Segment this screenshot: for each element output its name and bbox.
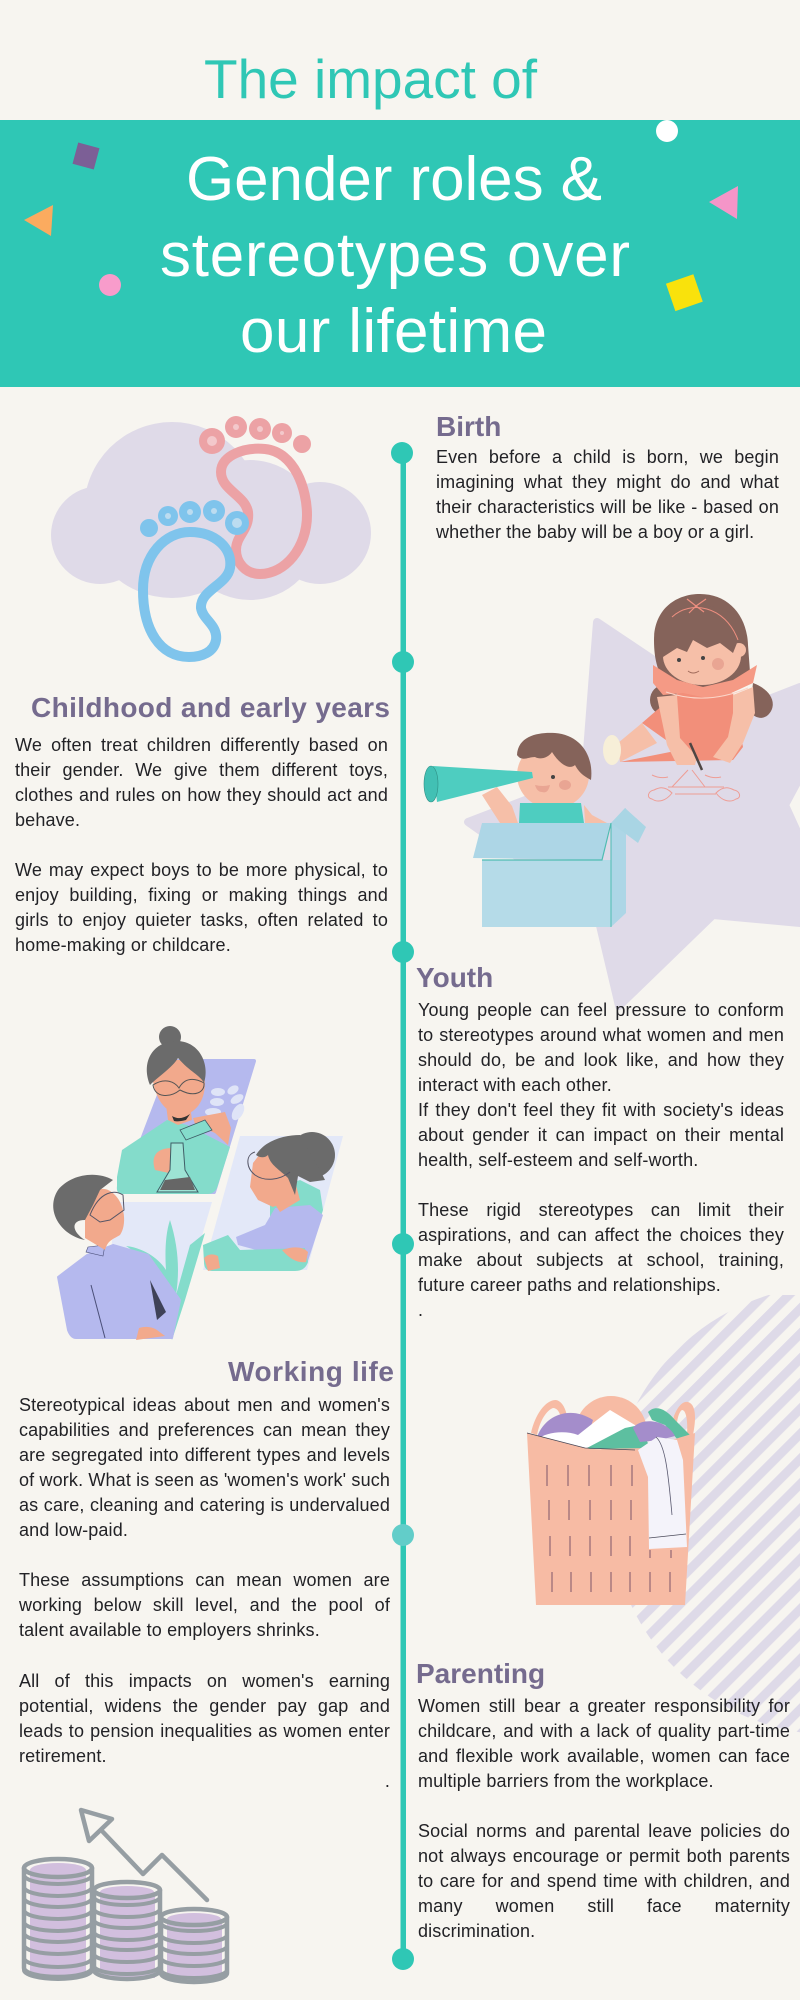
heading: Parenting: Parenting bbox=[416, 1658, 545, 1689]
icon: stacked coins with arrow bbox=[24, 1810, 227, 1982]
text: working life: . bbox=[385, 1771, 390, 1791]
icon: pink circle bbox=[99, 274, 121, 296]
text: working life: of work. What is seen as 'women's work' such bbox=[19, 1470, 390, 1490]
text: birth: imagining what they might do and what bbox=[436, 472, 779, 492]
text: parenting: to care for and spend time with children, and bbox=[418, 1871, 790, 1891]
timeline dot: youth bbox=[392, 941, 414, 963]
icon: yellow square bbox=[666, 274, 703, 311]
text: working life: working below skill level, and the pool of bbox=[19, 1595, 390, 1615]
text: youth: health, self-esteem and self-worth. bbox=[418, 1150, 698, 1170]
text: parenting: and flexible work available, women can face bbox=[418, 1746, 790, 1766]
heading: Birth: Birth bbox=[436, 411, 501, 442]
timeline dot: end bbox=[392, 1948, 414, 1970]
text: birth: their characteristics will be like - based on bbox=[436, 497, 779, 517]
text: parenting: multiple barriers from the workplace. bbox=[418, 1771, 714, 1791]
text: childhood: behave. bbox=[15, 810, 80, 830]
text: youth: aspirations, and can affect the choices they bbox=[418, 1225, 784, 1245]
text: working life: as care, cleaning and catering is undervalued bbox=[19, 1495, 390, 1515]
text: working life: These assumptions can mean women are bbox=[19, 1570, 390, 1590]
title: The impact of: The impact of bbox=[204, 48, 538, 110]
text: parenting: not always encourage or permit both parents bbox=[418, 1846, 790, 1866]
icon: pink triangle bbox=[709, 186, 738, 219]
illustration: girl drawing bbox=[603, 594, 773, 801]
text: working life bbox=[19, 1395, 390, 1791]
header band bbox=[0, 120, 800, 387]
text: youth: future career paths and relationships. bbox=[418, 1275, 721, 1295]
timeline dot: childhood bbox=[392, 651, 414, 673]
timeline bbox=[391, 442, 414, 1970]
text: birth bbox=[436, 447, 779, 542]
text: childhood: We often treat children differently based on bbox=[15, 735, 388, 755]
timeline dot: parenting bbox=[392, 1524, 414, 1546]
text: childhood: their gender. We give them different toys, bbox=[15, 760, 388, 780]
text: working life: capabilities and preferences can mean they bbox=[19, 1420, 390, 1440]
timeline dot: working life bbox=[392, 1233, 414, 1255]
heading: Youth: Youth bbox=[416, 962, 493, 993]
text: parenting: Women still bear a greater responsibility for bbox=[418, 1696, 790, 1716]
text: childhood bbox=[15, 735, 388, 955]
icon: purple square bbox=[73, 143, 99, 169]
text: parenting bbox=[418, 1696, 790, 1941]
text: working life: potential, widens the gender pay gap and bbox=[19, 1696, 390, 1716]
text: birth: Even before a child is born, we begin bbox=[436, 447, 779, 467]
text: parenting: childcare, and with a lack of quality part-time bbox=[418, 1721, 790, 1741]
icon: white circle bbox=[656, 120, 678, 142]
text: working life: All of this impacts on women's earning bbox=[19, 1671, 390, 1691]
heading: Working life: Working life bbox=[228, 1356, 394, 1387]
text: youth: If they don't feel they fit with society's ideas bbox=[418, 1100, 784, 1120]
text: childhood: clothes and rules on how they should act and bbox=[15, 785, 388, 805]
text: youth: make about subjects at school, training, bbox=[418, 1250, 784, 1270]
text: childhood: girls to enjoy quieter tasks, often related to bbox=[15, 910, 388, 930]
text: youth: These rigid stereotypes can limit their bbox=[418, 1200, 784, 1220]
heading: Childhood and early years: Childhood and early years bbox=[31, 692, 390, 723]
text: parenting: many women still face maternity bbox=[418, 1896, 790, 1916]
text: childhood: home-making or childcare. bbox=[15, 935, 231, 955]
text: youth: should do, be and look like, and how they bbox=[418, 1050, 784, 1070]
text: working life: talent available to employers shrinks. bbox=[19, 1620, 320, 1640]
heading: Gender roles and stereotypes: stereotypes over bbox=[160, 221, 630, 290]
illustration: laundry basket bbox=[527, 1396, 695, 1605]
text: parenting: discrimination. bbox=[418, 1921, 535, 1941]
text: working life: and low-paid. bbox=[19, 1520, 128, 1540]
icon: orange triangle bbox=[24, 205, 53, 236]
timeline dot: birth bbox=[391, 442, 413, 464]
text: youth: Young people can feel pressure to conform bbox=[418, 1000, 784, 1020]
text: youth bbox=[418, 1000, 784, 1320]
illustration: baby footprints on cloud bbox=[51, 416, 371, 657]
text: working life: leads to pension inequalities as women enter bbox=[19, 1721, 390, 1741]
text: working life: Stereotypical ideas about men and women's bbox=[19, 1395, 390, 1415]
text: working life: retirement. bbox=[19, 1746, 107, 1766]
illustration: three scientists bbox=[53, 1026, 343, 1340]
text: childhood: enjoy building, fixing or making things and bbox=[15, 885, 388, 905]
illustration: boy in box with telescope bbox=[424, 733, 646, 927]
text: youth: . bbox=[418, 1300, 423, 1320]
text: parenting: Social norms and parental leave policies do bbox=[418, 1821, 790, 1841]
heading: Gender roles and stereotypes: our lifetime bbox=[240, 297, 547, 366]
text: working life: are segregated into different types and levels bbox=[19, 1445, 390, 1465]
text: birth: whether the baby will be a boy or a girl. bbox=[436, 522, 754, 542]
text: youth: interact with each other. bbox=[418, 1075, 612, 1095]
text: childhood: We may expect boys to be more physical, to bbox=[15, 860, 388, 880]
text: youth: to stereotypes around what women and men bbox=[418, 1025, 784, 1045]
heading: Gender roles and stereotypes: Gender roles & bbox=[186, 145, 602, 214]
text: youth: about gender it can impact on their mental bbox=[418, 1125, 784, 1145]
heading: Gender roles and stereotypes bbox=[160, 145, 630, 366]
illustration: lilac star bbox=[468, 622, 800, 1006]
